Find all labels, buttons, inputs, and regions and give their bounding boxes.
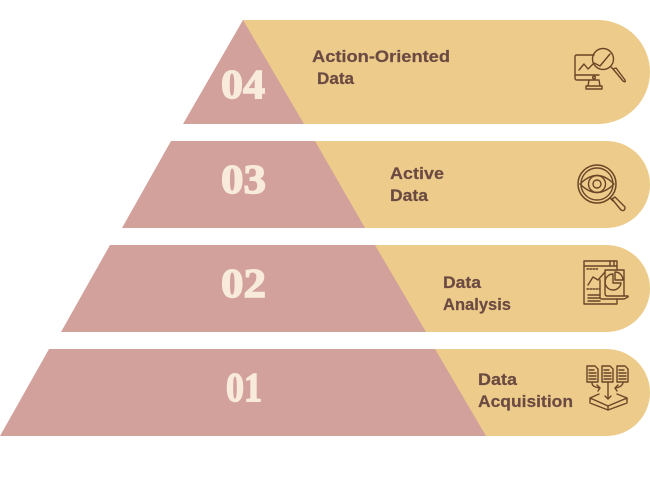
tier 2 label: Analysis bbox=[443, 296, 511, 314]
icon: monitor with magnifier bbox=[575, 48, 625, 89]
tier 4 number: 04 bbox=[221, 61, 265, 107]
tier 1 yellow band bbox=[49, 349, 650, 436]
tier 2 pink trapezoid bbox=[61, 245, 426, 332]
tier 3 label: Active bbox=[390, 165, 444, 183]
tier 2 number: 02 bbox=[221, 260, 266, 306]
tier 2: data analysis bbox=[61, 245, 650, 332]
tier 4: action-oriented data bbox=[183, 20, 650, 124]
icon: report with pie chart bbox=[584, 261, 628, 304]
icon: eye in magnifier bbox=[578, 165, 625, 211]
tier 1 pink trapezoid bbox=[0, 349, 486, 436]
tier 3 number: 03 bbox=[221, 156, 266, 202]
tier 4 pink triangle bbox=[183, 20, 304, 124]
tier 3 yellow band bbox=[171, 141, 650, 228]
tier 3 label: Data bbox=[390, 187, 429, 205]
tier 4 label: Data bbox=[317, 70, 355, 88]
tier 3 pink trapezoid bbox=[122, 141, 365, 228]
tier 1 label: Acquisition bbox=[478, 393, 573, 411]
tier 3: active data bbox=[122, 141, 650, 228]
tier 1 number: 01 bbox=[226, 364, 262, 410]
icon: documents into box bbox=[587, 366, 628, 410]
tier 2 yellow band bbox=[110, 245, 650, 332]
tier 2 label: Data bbox=[443, 274, 482, 292]
tier 1 label: Data bbox=[478, 371, 518, 389]
tier 4 label: Action-Oriented bbox=[312, 48, 450, 66]
tier 4 yellow band bbox=[243, 20, 650, 124]
tier 1: data acquisition bbox=[0, 349, 650, 436]
